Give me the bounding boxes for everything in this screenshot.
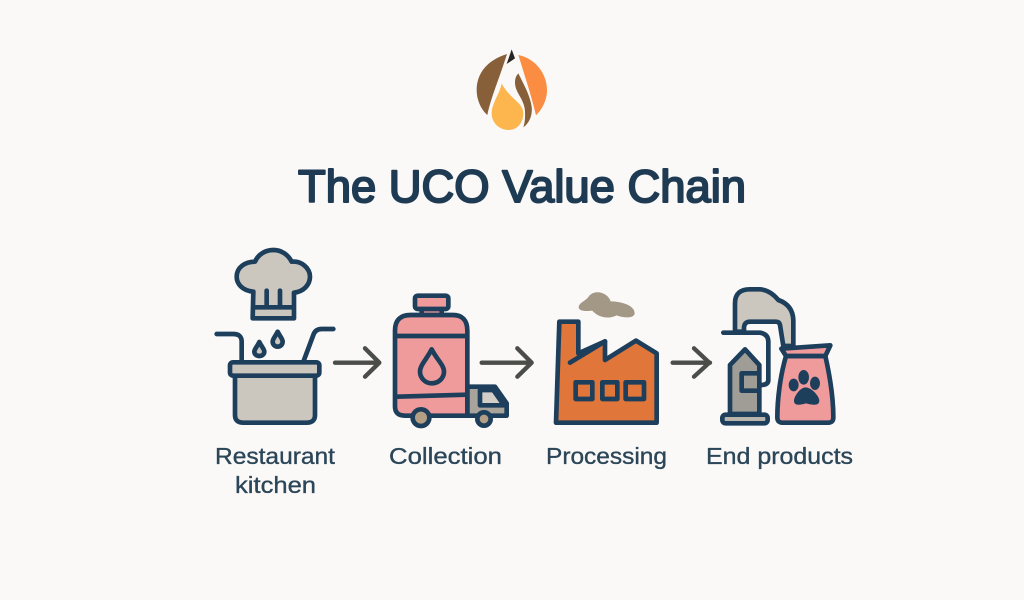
icon: pet food bag bbox=[777, 345, 833, 423]
icon: fuel pump bbox=[722, 349, 768, 423]
icon: oil drops bbox=[254, 332, 283, 356]
icon: factory building bbox=[556, 322, 657, 423]
arrow: processing to end products bbox=[673, 348, 710, 377]
icon: chef hat and fryer bbox=[217, 250, 333, 423]
icon: oil tank truck bbox=[395, 296, 507, 426]
icon: fryer pot bbox=[217, 329, 333, 423]
icon: chef hat bbox=[237, 250, 310, 318]
icon: smoke bbox=[579, 292, 635, 318]
label: restaurant kitchen: Restaurant bbox=[215, 443, 336, 469]
icon: flame logo bbox=[477, 49, 547, 130]
label: restaurant kitchen: kitchen bbox=[235, 472, 316, 498]
arrow: collection to processing bbox=[482, 348, 532, 377]
title: The UCO Value Chain bbox=[298, 161, 746, 212]
icon: oil tank bbox=[395, 296, 467, 416]
label: restaurant kitchen bbox=[215, 443, 336, 498]
icon: biofuel pump and pet food bag bbox=[722, 289, 833, 423]
label: collection: Collection bbox=[389, 443, 502, 469]
icon: fuel pipe bbox=[723, 289, 793, 385]
icon: truck cab bbox=[467, 387, 507, 416]
icon: wheels bbox=[413, 409, 491, 426]
label: processing: Processing bbox=[546, 443, 667, 469]
arrow: kitchen to collection bbox=[335, 348, 379, 377]
label: end products: End products bbox=[706, 443, 853, 469]
icon: factory bbox=[556, 292, 657, 423]
icon: paw print bbox=[789, 370, 820, 405]
